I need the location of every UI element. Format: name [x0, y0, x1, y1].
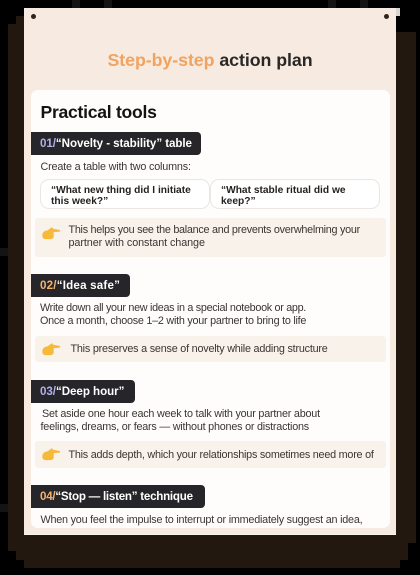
panel: practical tools	[31, 90, 390, 528]
note 02 text: This preserves a sense of novelty while adding structure	[70, 343, 328, 355]
section 02 text	[40, 302, 306, 326]
section 04 tag: 04/“Stop — listen” technique	[40, 490, 193, 503]
section 02 tag	[31, 274, 130, 297]
section 04 tag	[31, 485, 204, 508]
icon: pointing hand	[42, 343, 60, 356]
note 01 text: This helps you see the balance and prevents overwhelming your	[68, 224, 360, 236]
section 01 intro: Create a table with two columns:	[40, 161, 191, 173]
note 03 text: This adds depth, which your relationships sometimes need more of	[68, 448, 374, 460]
pin: left	[31, 14, 36, 19]
section 04 text: When you feel the impulse to interrupt or immediately suggest an idea,	[40, 514, 362, 526]
note 02	[35, 336, 386, 362]
column card: stable ritual: keep?”	[221, 196, 256, 207]
note 01 text: partner with constant change	[68, 236, 205, 248]
icon: pointing hand	[42, 227, 60, 240]
section 03 text: Set aside one hour each week to talk with your partner about	[42, 408, 320, 420]
note 03	[35, 441, 386, 468]
section 01 tag	[31, 132, 201, 155]
note 01 text	[68, 224, 360, 248]
column card: stable ritual	[210, 179, 380, 209]
column card: new thing: this week?”	[51, 196, 108, 207]
section 02 tag: 02/“Idea safe”	[40, 279, 120, 292]
section 02 text: Write down all your new ideas in a special notebook or app.	[40, 302, 306, 314]
pin: right	[384, 14, 389, 19]
paper corner sliver	[396, 8, 400, 16]
section 03 tag: 03/“Deep hour”	[40, 385, 124, 398]
section 03 text line 2: feelings, dreams, or fears — without phones or distractions	[40, 420, 309, 432]
icon: pointing hand	[42, 448, 60, 460]
section 01 tag: 01/“Novelty - stability” table	[40, 137, 192, 150]
column card: new thing	[40, 179, 210, 209]
section 03 tag	[31, 380, 135, 403]
column card: new thing: “What new thing did I initiate	[51, 185, 191, 196]
title: Step-by-step action plan	[107, 50, 313, 70]
heading: practical tools: Practical tools	[40, 102, 157, 122]
section 02 text: Once a month, choose 1–2 with your partner to bring to life	[40, 314, 306, 326]
note 01	[35, 218, 386, 257]
column card: stable ritual: “What stable ritual did we	[221, 185, 346, 196]
